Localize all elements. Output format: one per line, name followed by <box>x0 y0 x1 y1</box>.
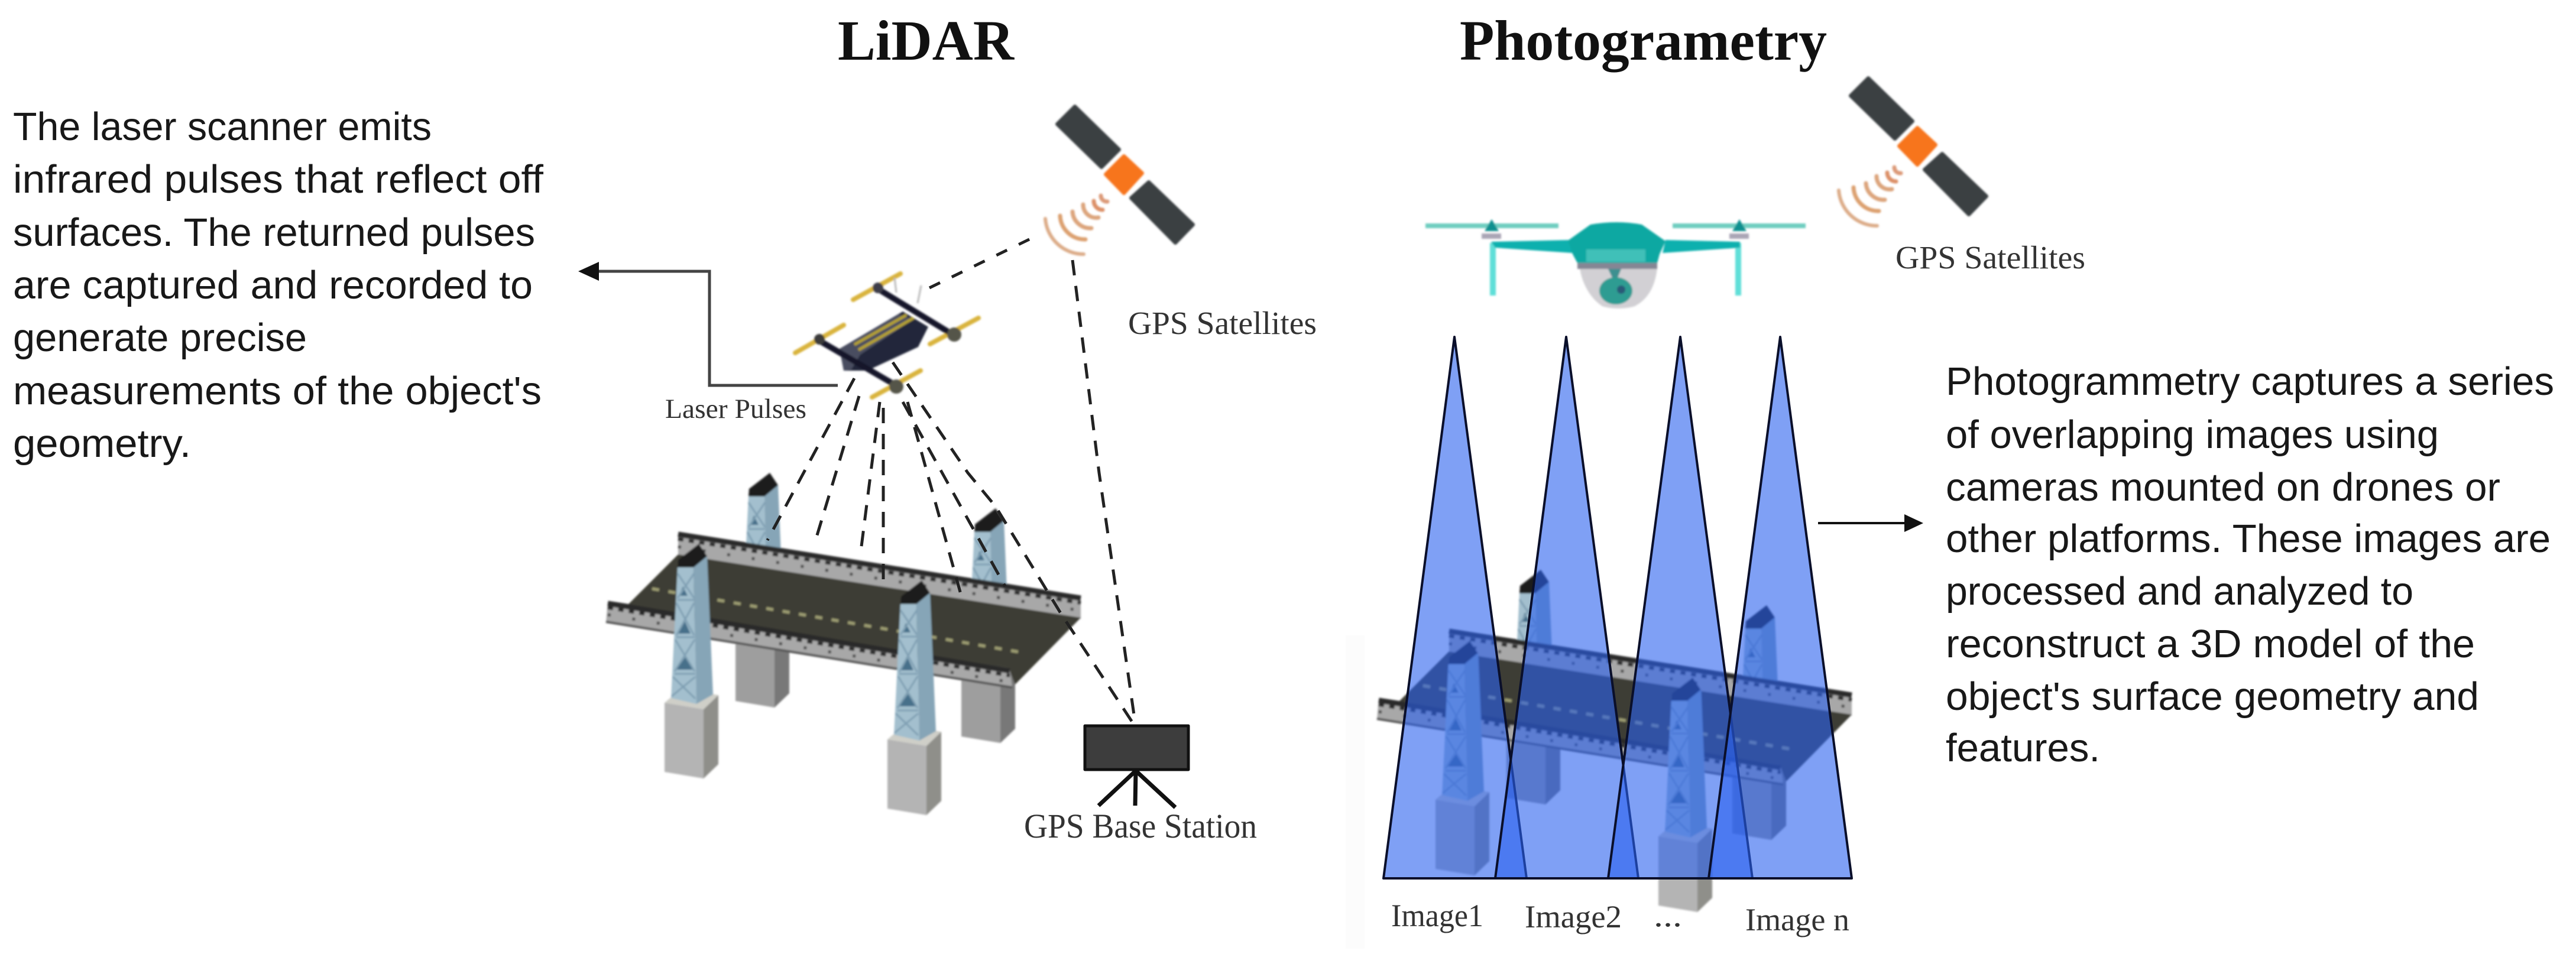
labels: image captions: Image1 <box>1391 898 1483 933</box>
text block: photogrammetry description: features. <box>1946 726 2100 770</box>
image footprints: overlapping triangles <box>1383 337 1852 878</box>
text block: LiDAR description: infrared pulses that reflect off <box>13 157 543 202</box>
bridge: LiDAR scene <box>606 473 1081 815</box>
text block: photogrammetry description: processed and analyzed to <box>1946 569 2413 614</box>
bridge: photogrammetry scene <box>1377 570 1852 912</box>
heading: Photogrammetry: Photogrametry <box>1460 9 1827 72</box>
text block: photogrammetry description: reconstruct a 3D model of the <box>1946 622 2475 666</box>
text block: photogrammetry description: object's surface geometry and <box>1946 674 2479 719</box>
text block: photogrammetry description: other platforms. These images are <box>1946 517 2551 561</box>
dashed laser and GPS signal lines <box>767 236 1135 723</box>
labels: image captions: Image n <box>1745 902 1849 937</box>
icon: LiDAR drone <box>795 274 978 397</box>
icon: GPS base station <box>1085 726 1188 807</box>
label: GPS Satellites (photogrammetry): GPS Satellites <box>1895 239 2085 275</box>
labels: image captions <box>1391 898 1849 937</box>
arrow: footprints to photogrammetry description <box>1818 514 1923 532</box>
text block: LiDAR description: generate precise <box>13 316 307 360</box>
labels: image captions: ... <box>1654 898 1682 933</box>
label: Laser Pulses: Laser Pulses <box>665 394 806 424</box>
text block: photogrammetry description <box>1946 359 2554 770</box>
label: GPS Satellites (LiDAR): GPS Satellites <box>1128 305 1317 341</box>
text block: photogrammetry description: of overlapping images using <box>1946 413 2439 457</box>
text block: photogrammetry description: cameras mounted on drones or <box>1946 465 2500 510</box>
arrow: drone to LiDAR description <box>578 262 838 385</box>
text block: LiDAR description <box>13 105 543 466</box>
text block: LiDAR description: are captured and recorded to <box>13 263 533 307</box>
icon: photogrammetry drone <box>1425 219 1806 309</box>
icon: LiDAR satellite <box>1045 106 1193 254</box>
text block: LiDAR description: measurements of the object's <box>13 369 542 413</box>
text block: photogrammetry description: Photogrammetry captures a series <box>1946 359 2554 404</box>
heading: LiDAR: LiDAR <box>838 9 1015 72</box>
faint scan artefact <box>1346 635 1365 949</box>
text block: LiDAR description: surfaces. The returned pulses <box>13 210 535 255</box>
text block: LiDAR description: The laser scanner emits <box>13 105 432 149</box>
label: GPS Base Station: GPS Base Station <box>1024 807 1257 845</box>
text block: LiDAR description: geometry. <box>13 421 191 466</box>
labels: image captions: Image2 <box>1525 899 1622 934</box>
icon: photogrammetry satellite <box>1839 78 1987 226</box>
